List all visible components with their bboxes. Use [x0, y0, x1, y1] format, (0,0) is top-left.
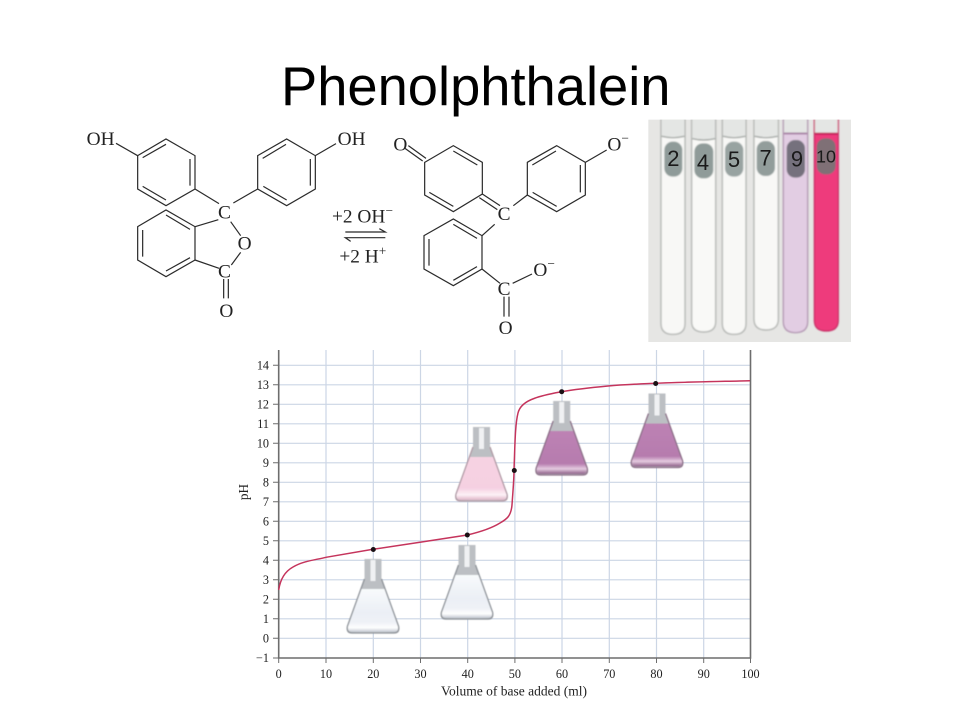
x axis numbers: 100: [741, 667, 760, 681]
bonds around central carbon: [116, 143, 336, 298]
y axis numbers: −1: [256, 651, 269, 665]
atom labels left structure: C: [218, 262, 231, 283]
tube pH 9: [783, 105, 808, 333]
tube numbers: 4: [697, 150, 709, 175]
bonds: [405, 146, 607, 317]
atom labels left structure: O: [238, 233, 252, 254]
tube pH 10: [814, 105, 838, 331]
y axis numbers: 6: [263, 514, 269, 528]
quinone ring: [425, 146, 482, 212]
flask at 20 ml: [347, 559, 399, 633]
flask at 60 ml: [536, 401, 588, 475]
upper reagent label: +2 OH: [332, 206, 385, 227]
x axis numbers: 10: [320, 667, 332, 681]
y axis numbers: 7: [263, 495, 269, 509]
upper left phenol ring: [138, 139, 195, 206]
atom labels right structure: O: [533, 260, 547, 281]
atom labels left structure: OH: [338, 129, 366, 150]
atom labels left structure: C: [218, 202, 231, 223]
flask at 80 ml: [631, 394, 683, 468]
tube numbers: 5: [728, 147, 740, 172]
y axis numbers: 14: [257, 358, 269, 372]
chart: pH titration curve: [236, 350, 760, 698]
infographic canvas: [87, 66, 851, 698]
tube numbers: 7: [760, 146, 772, 171]
x axis numbers: 90: [698, 667, 710, 681]
equilibrium arrows and reagents: [332, 203, 393, 268]
lower reagent label: +2 H: [339, 247, 379, 268]
lower benzene ring: [138, 210, 195, 277]
tube numbers: 10: [816, 146, 836, 166]
atom labels right structure: −: [621, 131, 629, 146]
atom labels right structure: C: [498, 204, 511, 225]
y axis numbers: 0: [263, 632, 269, 646]
structure: quinoid dianion form (pink): [393, 131, 629, 339]
photo background: [648, 120, 851, 342]
tube pH 5: [722, 105, 746, 334]
y axis numbers: 4: [263, 554, 269, 568]
axes: [279, 350, 750, 658]
tube pH 4: [692, 105, 716, 332]
x axis numbers: 50: [509, 667, 521, 681]
atom labels left structure: O: [219, 301, 233, 322]
atom labels left structure: [87, 129, 366, 322]
axis ticks: [273, 365, 750, 663]
flask at 50 ml: [456, 427, 507, 501]
x axis numbers: 30: [414, 667, 427, 681]
flask at 40 ml: [441, 545, 493, 619]
x axis numbers: 70: [603, 667, 615, 681]
y axis numbers: 10: [257, 436, 269, 450]
x axis numbers: [276, 667, 760, 681]
benzoate ring: [424, 219, 482, 286]
phenolate ring: [527, 146, 585, 212]
title: Phenolphthalein: [281, 56, 670, 117]
y axis numbers: 5: [263, 534, 269, 548]
y axis numbers: 8: [263, 476, 269, 490]
y axis numbers: 13: [257, 378, 269, 392]
tube numbers: [667, 146, 836, 175]
upper reagent label: −: [385, 203, 393, 218]
y axis numbers: 12: [257, 398, 269, 412]
y axis title: pH: [236, 483, 251, 500]
x axis numbers: 80: [650, 667, 663, 681]
atom labels right structure: −: [547, 256, 555, 271]
atom labels left structure: OH: [87, 129, 115, 150]
titration curve: [279, 381, 750, 590]
y axis numbers: 2: [263, 592, 269, 606]
y axis numbers: 9: [263, 456, 269, 470]
structure: lactone form of phenolphthalein (colourless): [87, 129, 366, 322]
y axis numbers: 3: [263, 573, 269, 587]
tube numbers: 9: [791, 146, 803, 171]
atom labels right structure: C: [498, 279, 511, 300]
double arrow: [345, 229, 385, 241]
y axis numbers: [256, 358, 269, 665]
x axis numbers: 20: [367, 667, 379, 681]
grid lines: [326, 350, 704, 658]
atom labels right structure: O: [393, 135, 407, 156]
lower reagent label: +: [379, 243, 386, 258]
atom labels right structure: O: [499, 318, 513, 339]
y axis numbers: 1: [263, 612, 269, 626]
atom labels right structure: O: [607, 135, 621, 156]
tube pH 7: [754, 105, 778, 330]
x axis title: Volume of base added (ml): [441, 684, 587, 698]
x axis numbers: 40: [462, 667, 474, 681]
atom labels right structure: [393, 131, 629, 339]
x axis numbers: 60: [556, 667, 568, 681]
tube pH 2: [661, 105, 685, 334]
data points: [371, 381, 658, 552]
y axis numbers: 11: [257, 417, 269, 431]
upper right phenol ring: [258, 139, 315, 206]
panel: photo of six labelled test tubes: [648, 105, 851, 342]
x axis numbers: 0: [276, 667, 282, 681]
tube numbers: 2: [667, 146, 679, 171]
